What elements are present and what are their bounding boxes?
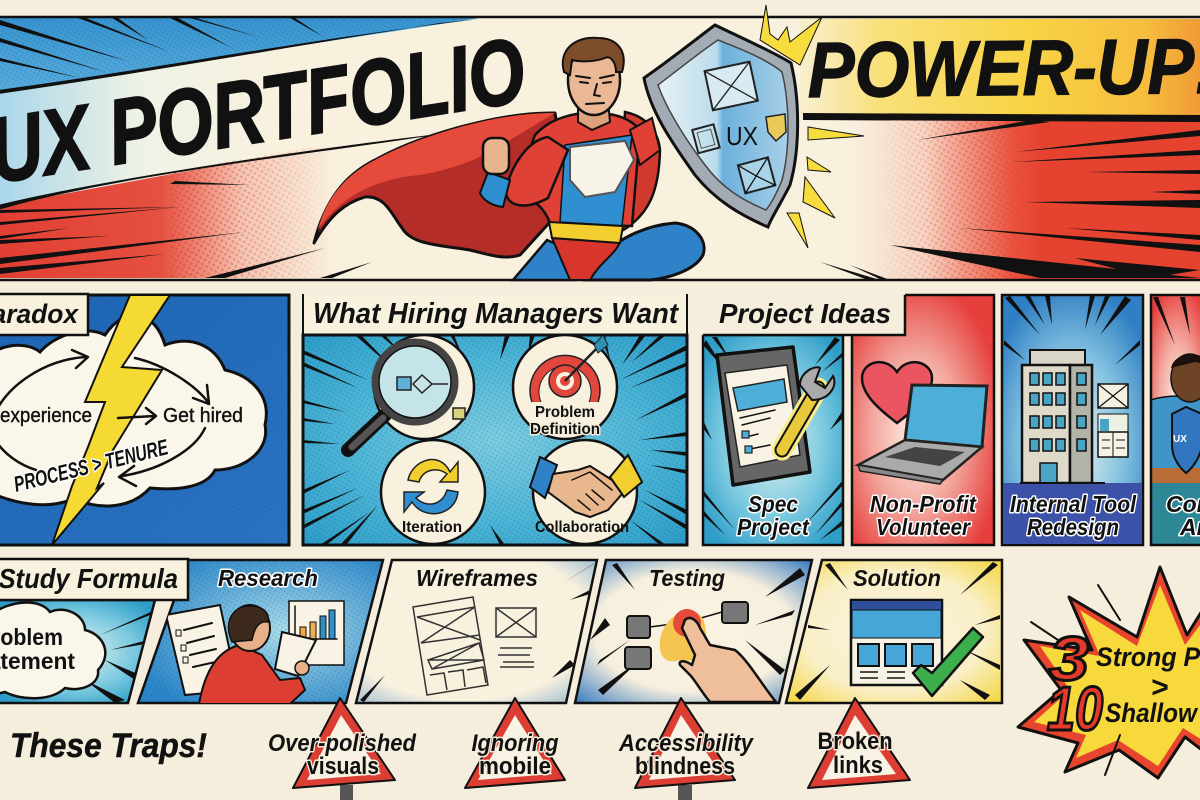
shield with UX icons bbox=[644, 25, 798, 227]
person with shield: UX bbox=[1173, 434, 1187, 445]
icon: office building bbox=[1022, 350, 1092, 483]
icon: wrench bbox=[782, 367, 834, 450]
icon: handshake bbox=[530, 440, 642, 544]
icon: target bbox=[513, 335, 617, 439]
panel: research bbox=[138, 560, 383, 704]
panel: non-profit volunteer bbox=[852, 295, 994, 545]
heading: project ideas: Project Ideas bbox=[719, 298, 891, 329]
hero legs bbox=[513, 240, 575, 280]
panel: the paradox bbox=[0, 294, 289, 545]
cycle arrows bbox=[0, 350, 209, 486]
text: greater than: > bbox=[1151, 671, 1169, 704]
icon: smartphone bbox=[717, 347, 810, 485]
shield text: UX: UX bbox=[726, 121, 758, 151]
callout: starburst 3 strong vs 10 shallow bbox=[1018, 567, 1200, 778]
panel frame lines bbox=[0, 17, 1200, 280]
panel: spec project bbox=[703, 335, 843, 545]
heading: project ideas bbox=[700, 290, 905, 335]
warning: over-polished visuals bbox=[268, 698, 417, 800]
red burst right bbox=[820, 118, 1200, 280]
hero head bbox=[578, 100, 610, 130]
warning: over-polished visuals: Over-polished bbox=[268, 730, 417, 757]
text: iteration: Iteration bbox=[402, 519, 462, 536]
text: internal tool redesign: Internal Tool bbox=[1010, 491, 1137, 517]
warning: over-polished visuals: visuals bbox=[307, 753, 379, 780]
cloud bbox=[0, 315, 266, 506]
title banner strip bbox=[0, 19, 560, 206]
red burst left bbox=[0, 146, 372, 278]
icon: pointing hand bbox=[680, 618, 776, 702]
label: testing: Testing bbox=[649, 565, 725, 591]
text: spec project: Spec bbox=[748, 491, 798, 517]
warning: accessibility blindness: Accessibility bbox=[618, 730, 755, 757]
yellow band right bbox=[800, 19, 1200, 116]
warning: broken links: Broken bbox=[818, 728, 892, 755]
panel: problem statement bbox=[0, 600, 155, 703]
lightning bolt bbox=[52, 295, 170, 545]
text: experience: experience bbox=[0, 405, 92, 427]
icon: yellow impact burst bbox=[760, 5, 864, 248]
text: spec project: Project bbox=[737, 514, 810, 540]
text: non-profit volunteer bbox=[870, 491, 977, 540]
heading: these traps: These Traps! bbox=[10, 727, 207, 765]
text: non-profit volunteer: Non-Profit bbox=[870, 491, 977, 517]
icon: magnifying glass bbox=[348, 335, 474, 450]
text: spec project bbox=[737, 491, 810, 540]
icon: checklist paper bbox=[166, 605, 238, 695]
hero chest emblem bbox=[570, 141, 634, 197]
hero belt bbox=[549, 222, 623, 243]
superhero figure bbox=[314, 38, 704, 280]
text: problem definition: Definition bbox=[530, 421, 600, 438]
cloud: problem statement bbox=[0, 603, 105, 698]
icon: laptop bbox=[858, 385, 987, 484]
warning: ignoring mobile: Ignoring bbox=[472, 730, 559, 757]
text: problem definition bbox=[530, 404, 600, 438]
text: get hired: Get hired bbox=[163, 405, 243, 427]
text: internal tool redesign bbox=[1010, 491, 1137, 540]
text: process over tenure: PROCESS > TENURE bbox=[11, 434, 171, 497]
banner ink lines bbox=[0, 19, 1200, 210]
label: solution: Solution bbox=[853, 565, 941, 591]
warning: accessibility blindness bbox=[618, 698, 755, 800]
icon: browser window bbox=[851, 600, 942, 685]
hero torso bbox=[515, 113, 640, 226]
number: 3: 3 bbox=[1049, 625, 1089, 694]
warning: accessibility blindness: blindness bbox=[635, 753, 735, 780]
number: 10: 10 bbox=[1047, 675, 1103, 744]
panel: internal tool redesign bbox=[1002, 295, 1143, 545]
hero arm and fist bbox=[506, 137, 568, 205]
frame: fourth project idea bbox=[1151, 295, 1200, 545]
warning: broken links: links bbox=[833, 752, 883, 779]
person with shield bbox=[1151, 354, 1200, 483]
researcher figure bbox=[199, 605, 316, 704]
panel: hero banner bbox=[0, 5, 1200, 280]
label: research: Research bbox=[218, 565, 318, 591]
warning: ignoring mobile: mobile bbox=[479, 753, 551, 780]
panel: fourth project idea bbox=[1151, 295, 1200, 545]
blue speed-line sky bbox=[0, 18, 480, 92]
panel: wireframes bbox=[356, 560, 597, 703]
icon: heart bbox=[862, 362, 932, 423]
panel: what hiring managers want bbox=[303, 294, 687, 545]
hero cape bbox=[314, 113, 570, 257]
icon: check mark bbox=[913, 628, 983, 696]
icon: iteration arrows bbox=[381, 440, 485, 544]
label: wireframes: Wireframes bbox=[416, 565, 538, 591]
icon: network squares bbox=[625, 602, 748, 669]
text: problem definition: Problem bbox=[535, 404, 595, 421]
text: collaboration: Collaboration bbox=[535, 519, 629, 536]
text: internal tool redesign: Redesign bbox=[1027, 514, 1119, 540]
text: non-profit volunteer: Volunteer bbox=[876, 514, 971, 540]
heading: paradox bbox=[0, 294, 88, 335]
panel: testing bbox=[575, 560, 812, 703]
warning: ignoring mobile bbox=[465, 698, 565, 788]
panel: solution bbox=[786, 560, 1002, 703]
icon: bar chart board bbox=[289, 601, 344, 665]
warning: broken links bbox=[808, 698, 910, 788]
heading: what hiring managers want: What Hiring Managers Want bbox=[313, 298, 679, 330]
icon: interface wireframes bbox=[1098, 384, 1128, 457]
caption band bbox=[1003, 483, 1142, 544]
text: cropped caption bbox=[1166, 494, 1200, 536]
icon: wireframe sketch bbox=[413, 597, 536, 695]
icon: tap glow bbox=[660, 609, 706, 661]
